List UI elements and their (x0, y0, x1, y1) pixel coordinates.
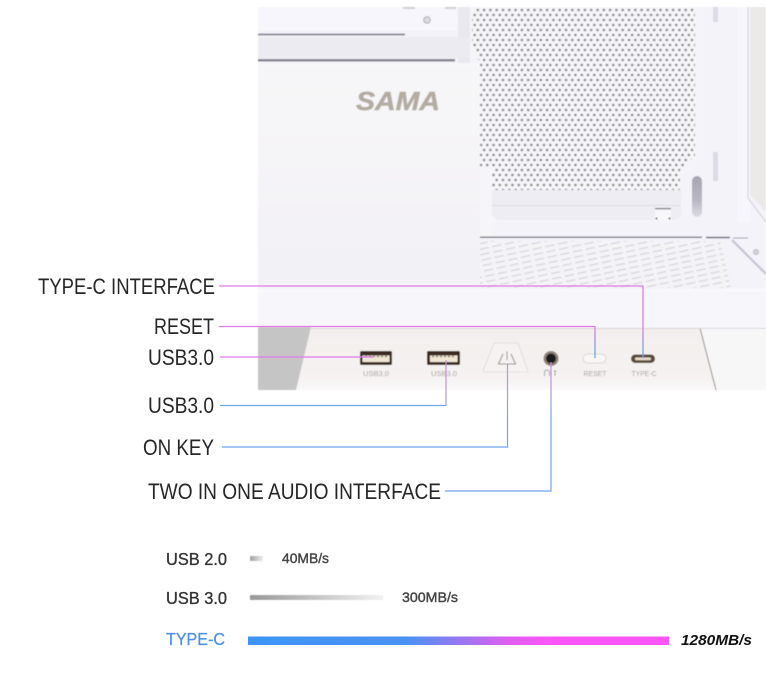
mesh backing (470, 7, 703, 222)
speed row: type-c (166, 629, 752, 649)
power key (483, 343, 528, 372)
label: two in one audio interface: TWO IN ONE AUDIO INTERFACE (148, 479, 441, 504)
label: reset: RESET (154, 314, 214, 339)
callout line: usb 1 (220, 356, 373, 358)
label: type-c interface: TYPE-C INTERFACE (38, 274, 215, 299)
port: USB3.0 right: USB3.0 (431, 371, 457, 378)
speed row: usb 3.0 (166, 588, 458, 608)
I/O panel (258, 327, 766, 390)
speed row: usb 2.0: USB 2.0 (166, 549, 227, 569)
type-c port: TYPE-C (632, 371, 656, 378)
callout line: type-c (219, 286, 643, 358)
speed row: usb 3.0: 300MB/s (402, 590, 458, 605)
speed row: usb 3.0: USB 3.0 (166, 588, 227, 608)
side glass (738, 7, 766, 222)
callout line: usb 2 (220, 360, 446, 406)
label: usb3.0 lower: USB3.0 (148, 393, 214, 418)
lower frame recess (492, 7, 718, 220)
port: USB3.0 left: USB3.0 (363, 371, 389, 378)
callout line: reset (219, 326, 595, 358)
top-left frame (258, 7, 480, 63)
PSU shroud (258, 63, 492, 288)
callout line: on key (222, 364, 508, 447)
product photo: case front (258, 7, 766, 390)
speed row: type-c: 1280MB/s (681, 633, 752, 649)
audio jack (544, 351, 558, 376)
mesh panel (472, 7, 695, 190)
speed row: type-c: TYPE-C (166, 629, 225, 649)
label: usb3.0 upper: USB3.0 (148, 345, 214, 370)
logo: SAMA: SAMA (356, 88, 440, 116)
port: USB3.0 right (427, 351, 460, 378)
port: USB3.0 left (360, 351, 392, 378)
label: on key: ON KEY (143, 435, 214, 460)
reset button (583, 354, 607, 378)
speed row: usb 2.0 (166, 549, 329, 569)
reset button: RESET (584, 371, 607, 378)
floor mesh (480, 241, 731, 288)
callout line: audio (445, 362, 551, 491)
type-c port (631, 354, 656, 378)
speed row: usb 2.0: 40MB/s (282, 551, 329, 566)
front strip (258, 288, 766, 328)
